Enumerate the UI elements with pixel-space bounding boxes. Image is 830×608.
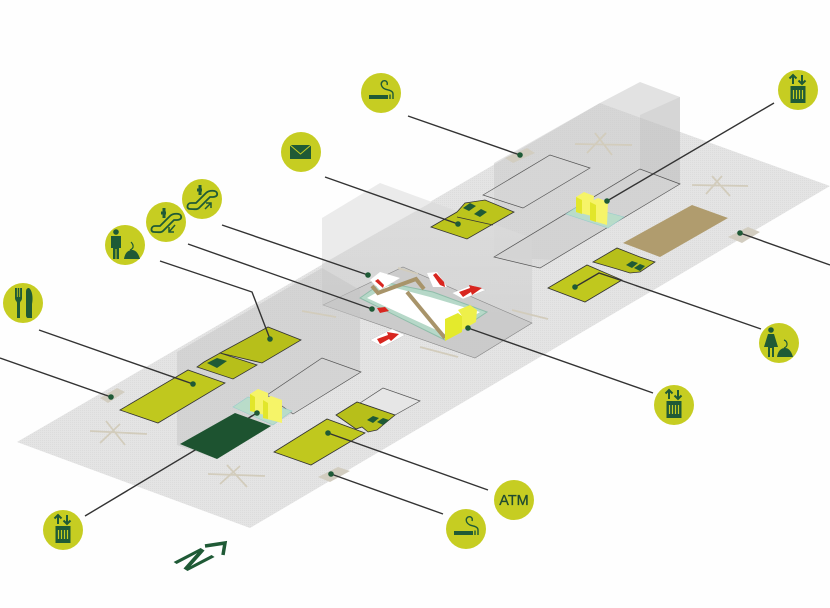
icon: cutlery xyxy=(3,283,43,323)
room outline: upper right xyxy=(494,169,680,268)
icon: mail xyxy=(281,132,321,172)
room outline: lower right xyxy=(360,388,420,415)
icon: escalator down xyxy=(146,202,186,242)
translucent building volume: upper right xyxy=(494,82,680,260)
green area: woman restroom xyxy=(548,248,655,302)
line: lift lower left xyxy=(85,413,257,516)
icon: lift middle right xyxy=(654,385,694,425)
icon: escalator up xyxy=(182,179,222,219)
icon: smoking top xyxy=(361,73,401,113)
green area: restaurant xyxy=(120,370,225,423)
green area: man restroom xyxy=(220,327,301,363)
lift lower left xyxy=(233,389,292,425)
room outline: upper xyxy=(483,155,590,208)
icon: smoking bottom xyxy=(446,509,486,549)
central atrium xyxy=(360,272,487,347)
icon: women's restroom xyxy=(759,323,799,363)
green area: ATM xyxy=(274,419,365,465)
leader lines xyxy=(0,103,830,514)
icon: ATM xyxy=(494,480,534,520)
green area: mail xyxy=(431,200,514,239)
lift central xyxy=(445,305,477,341)
escalators xyxy=(372,279,445,338)
room outline: lower left xyxy=(267,358,361,414)
lift upper right xyxy=(566,192,624,228)
crossing markings xyxy=(90,133,748,487)
translucent building volume: lower left xyxy=(177,268,360,459)
smoking patches xyxy=(100,148,760,482)
floor plate xyxy=(17,103,830,528)
green area: restroom annex xyxy=(197,353,257,379)
icon: ATM: ATM xyxy=(499,493,529,509)
north arrow: N xyxy=(164,542,225,577)
red arrows xyxy=(370,273,486,347)
translucent building volume: centre xyxy=(322,183,532,358)
leader line end dots xyxy=(108,152,743,477)
tan area xyxy=(623,205,728,257)
icon: men's restroom xyxy=(105,225,145,265)
dark green area xyxy=(180,413,271,459)
green area: lower right restroom xyxy=(336,402,395,432)
icon: lift top right xyxy=(778,70,818,110)
icon: lift bottom left xyxy=(43,510,83,550)
